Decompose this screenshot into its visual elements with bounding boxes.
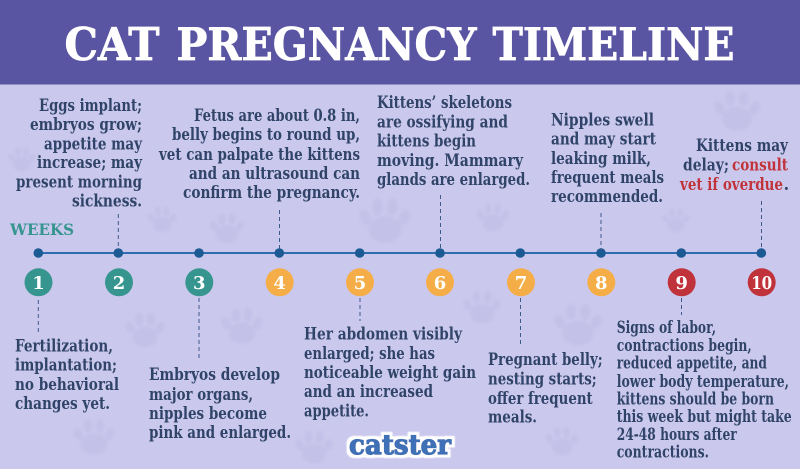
week 10 text: . [784, 175, 789, 194]
badge 8 [587, 268, 615, 296]
badge 7 [507, 268, 535, 296]
dashed connectors [38, 195, 762, 361]
badge 5: 5 [354, 273, 366, 294]
week 4 text: and an ultrasound can [189, 164, 360, 183]
week 5 text: appetite. [304, 402, 369, 421]
week 6 text: glands are enlarged. [377, 170, 530, 189]
week 8 text [551, 111, 664, 206]
week 10 text: consult [732, 156, 788, 175]
title [64, 18, 734, 71]
week 9 text [617, 318, 792, 462]
week 2 text: sickness. [72, 192, 142, 211]
week 3 text: nipples become [149, 404, 267, 423]
badge 3 [185, 268, 213, 296]
badge 9 [668, 268, 696, 296]
week 9 text: 24-48 hours after [617, 425, 737, 444]
week 6 text: are ossifying and [377, 113, 508, 132]
week 9 text: contractions begin, [617, 336, 752, 355]
week 2 text [16, 96, 142, 211]
week 1 text [15, 337, 119, 413]
week 3 text: major organs, [149, 385, 253, 404]
week 10 text: delay; [683, 156, 729, 175]
week 8 text: frequent meals [551, 168, 664, 187]
week 3 text [149, 365, 291, 442]
title: CAT [64, 18, 160, 71]
badge 8: 8 [595, 273, 608, 294]
badge 9: 9 [675, 273, 688, 294]
week 1 text: implantation; [15, 356, 117, 375]
week 6 text: moving. Mammary [377, 151, 523, 170]
week 1 text: no behavioral [15, 375, 119, 394]
week 6 text [377, 93, 530, 189]
week 2 text: Eggs implant; [39, 96, 142, 115]
week 8 text: leaking milk, [551, 149, 651, 168]
badge 1: 1 [32, 273, 45, 294]
week 4 text: Fetus are about 0.8 in, [194, 106, 360, 125]
week 8 text: and may start [551, 130, 656, 148]
week 3 text: Embryos develop [149, 365, 280, 384]
week 3 text: pink and enlarged. [149, 423, 291, 442]
week 1 text: changes yet. [15, 394, 110, 413]
badge 6: 6 [434, 273, 446, 294]
week 2 text: embryos grow; [30, 115, 142, 134]
weeks label: WEEKS [9, 220, 74, 239]
week 7 text: Pregnant belly; [488, 350, 603, 369]
week 4 text: belly begins to round up, [172, 125, 360, 144]
badge 5 [346, 268, 374, 296]
week 7 text [488, 350, 603, 427]
title: TIMELINE [492, 18, 734, 71]
week 5 text: and an increased [304, 382, 433, 401]
week 7 text: nesting starts; [488, 370, 597, 389]
badge 1 [24, 268, 52, 296]
title: PREGNANCY [176, 18, 477, 71]
catster logo: catster [349, 430, 452, 461]
week 6 text: kittens begin [377, 132, 476, 151]
week 1 text: Fertilization, [15, 337, 113, 356]
week 7 text: offer frequent [488, 389, 593, 408]
week 4 text: confirm the pregnancy. [183, 183, 360, 202]
header banner [0, 0, 800, 84]
week 4 text [158, 106, 360, 202]
week 10 text [679, 136, 789, 194]
week 9 text: contractions. [617, 443, 709, 462]
week 6 text: Kittens’ skeletons [377, 93, 512, 112]
badge 4 [266, 268, 294, 296]
week badges [24, 268, 776, 296]
timeline axis [34, 248, 766, 258]
badge 7: 7 [515, 273, 527, 294]
week 2 text: increase; may [37, 153, 142, 172]
week 5 text: noticeable weight gain [304, 363, 476, 382]
badge 2 [105, 268, 133, 296]
badge 2: 2 [113, 273, 125, 294]
week 8 text: recommended. [551, 187, 663, 206]
week 4 text: vet can palpate the kittens [158, 145, 360, 164]
badge 3: 3 [193, 273, 206, 294]
week 9 text: Signs of labor, [617, 318, 716, 337]
week 8 text: Nipples swell [551, 111, 654, 130]
badge 10: 10 [751, 273, 772, 294]
badge 4: 4 [273, 273, 286, 294]
badge 6 [426, 268, 454, 296]
badge 10 [748, 268, 776, 296]
week 2 text: present morning [16, 173, 142, 192]
week 5 text: Her abdomen visibly [304, 324, 462, 343]
week 5 text [304, 324, 476, 421]
week 5 text: enlarged; she has [304, 344, 435, 363]
week 2 text: appetite may [44, 134, 142, 154]
week 7 text: meals. [488, 408, 537, 427]
